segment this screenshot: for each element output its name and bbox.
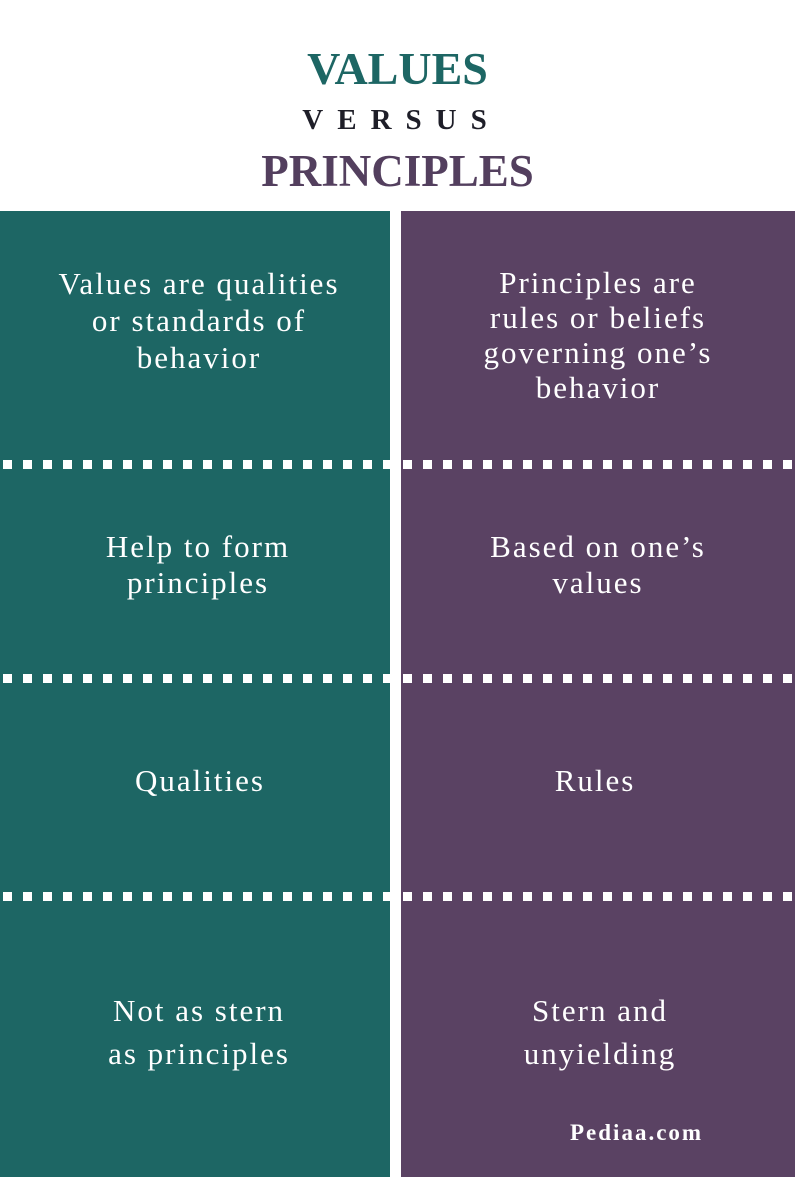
title: values: VALUES [307,43,488,94]
text: values definition: behavior [137,340,261,375]
text: principles strictness [524,993,676,1071]
text: values definition [58,266,340,375]
text: values definition: or standards of [92,303,306,338]
text: principles definition: behavior [536,370,660,405]
text: principles role: Based on one’s [490,529,706,564]
text: principles definition: governing one’s [484,335,712,370]
text: values role: principles [127,565,269,600]
text: principles definition [484,265,712,405]
dotted separators [3,460,393,469]
text: values role: Help to form [106,529,290,564]
watermark: Pediaa.com: Pediaa.com [570,1120,703,1145]
text: values definition: Values are qualities [58,266,340,301]
text: principles strictness: Stern and [532,993,668,1028]
text: values strictness: Not as stern [113,993,285,1028]
text: values strictness: as principles [108,1036,290,1071]
title: versus: VERSUS [302,104,501,136]
text: principles definition: rules or beliefs [490,300,706,335]
text: principles role [490,529,706,600]
text: principles definition: Principles are [499,265,697,300]
text: principles strictness: unyielding [524,1036,676,1071]
text: values nature: Qualities [135,763,265,798]
panel: values column [0,211,390,1177]
text: principles nature: Rules [555,763,635,798]
text: values role [106,529,290,600]
panel: principles column [401,211,795,1177]
title: principles: PRINCIPLES [261,146,534,196]
text: values strictness [108,993,290,1071]
text: principles role: values [552,565,644,600]
